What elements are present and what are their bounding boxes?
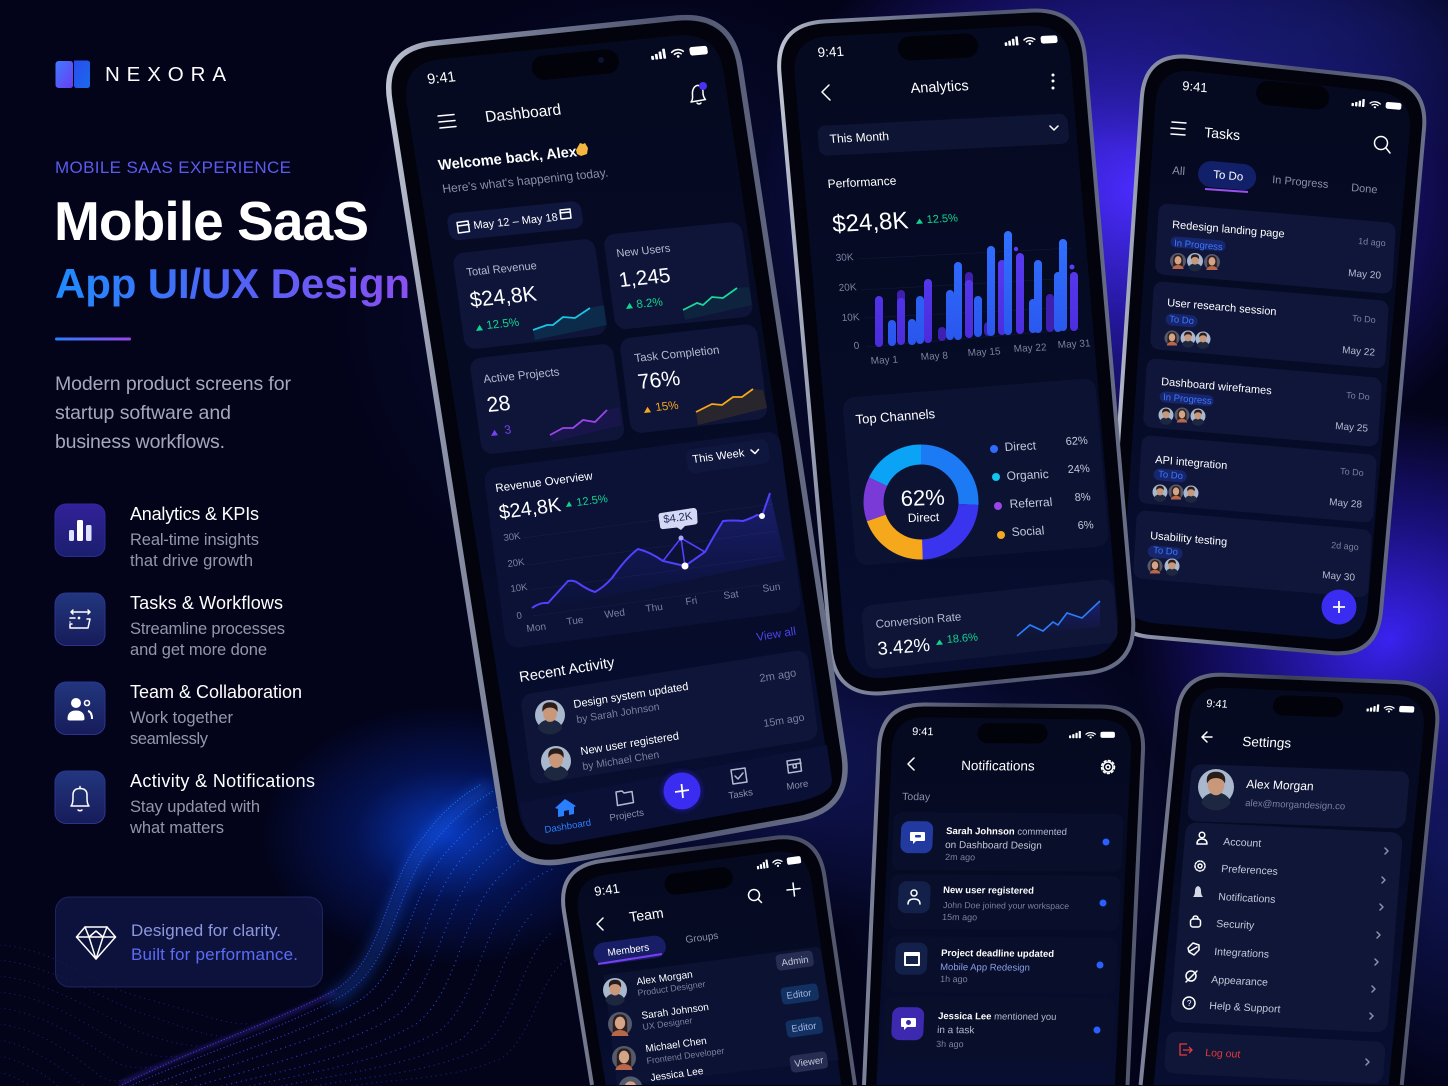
top channels card: Top Channels [855, 406, 936, 427]
header [822, 74, 1054, 100]
phone: notifications [864, 704, 1143, 1085]
card: wireframes: In Progress [1163, 392, 1212, 407]
phone: settings [1141, 675, 1437, 1085]
dotted particle wave [0, 785, 566, 1086]
recent activity: View all [756, 625, 797, 644]
member: michael: Editor [791, 1021, 818, 1035]
status bar: 9:41 [1182, 78, 1208, 95]
header: Settings [1242, 734, 1292, 751]
status bar: 9:41 [593, 881, 621, 899]
icon: workflow [55, 593, 105, 646]
tabs: Done [1351, 182, 1378, 196]
device frame [1108, 57, 1424, 653]
kpi: revenue: 12.5% [486, 317, 520, 332]
screen [1122, 71, 1410, 639]
tab: more: More [786, 779, 809, 793]
donut chart [874, 454, 968, 550]
header [1202, 732, 1292, 751]
feature: team [55, 682, 302, 748]
section label: Today [902, 791, 931, 803]
item: mention: Jessica Lee mentioned you [938, 1011, 1057, 1023]
feature: activity [55, 771, 315, 837]
member: sarah: UX Designer [642, 1015, 693, 1032]
item: mention: in a task [937, 1025, 976, 1036]
sparkline [550, 407, 622, 442]
main title: Mobile SaaS [54, 190, 369, 252]
row: security [1190, 916, 1380, 938]
member: alex: Product Designer [637, 979, 706, 998]
revenue overview: This Week [692, 447, 746, 466]
intro paragraph: Modern product screens for [55, 373, 292, 395]
line chart: Mon [526, 622, 547, 635]
header [1171, 122, 1390, 153]
row: design system: Design system updated [573, 681, 689, 711]
card: usability [1133, 510, 1372, 598]
conversion card: 18.6% [946, 632, 979, 646]
feature text: Streamline processes [130, 620, 285, 638]
screen [578, 852, 841, 1085]
feature text: that drive growth [130, 552, 253, 570]
device frame [563, 837, 855, 1085]
top channels card: Direct [908, 510, 940, 525]
row: design system [535, 667, 797, 734]
feature text: Tasks & Workflows [130, 593, 283, 613]
header: Analytics [910, 78, 969, 97]
member: jessica: Viewer [794, 1055, 825, 1070]
row: help: ? [1187, 999, 1192, 1008]
row: new user: by Michael Chen [582, 750, 660, 773]
line chart: Wed [604, 607, 626, 621]
log out: Log out [1205, 1047, 1241, 1061]
card: redesign: 1d ago [1358, 236, 1386, 248]
bar chart: 20K [838, 282, 857, 294]
feature text: Real-time insights [130, 531, 259, 549]
line chart: 30K [503, 531, 522, 544]
feature text: what matters [129, 819, 224, 837]
legend: Direct [1004, 438, 1037, 454]
line chart: Tue [566, 615, 585, 628]
item: comment: 2m ago [945, 852, 975, 862]
top channels card [842, 378, 1109, 566]
kpi: projects [469, 343, 625, 455]
kpi: completion: 76% [636, 367, 682, 394]
phone: tasks [1108, 57, 1424, 653]
header [438, 82, 707, 128]
conversion card: 3.42% [877, 634, 931, 659]
top channels card: 62% [900, 485, 945, 511]
row: account [1197, 832, 1388, 854]
revenue overview [483, 431, 802, 649]
item: user: New user registered [943, 885, 1034, 897]
member: michael: Michael Chen [645, 1036, 708, 1055]
tagline text: Built for performance. [131, 945, 298, 964]
bar chart: 10K [841, 312, 860, 324]
performance [827, 174, 959, 238]
feature text: Activity & Notifications [130, 771, 315, 791]
card: research: May 22 [1342, 345, 1376, 359]
card: research: User research session [1167, 297, 1277, 318]
item: comment: Sarah Johnson commented [946, 826, 1067, 838]
row: new user [541, 712, 805, 780]
card: redesign: Redesign landing page [1172, 219, 1285, 241]
card: wireframes: Dashboard wireframes [1161, 376, 1273, 397]
phone: team [563, 837, 855, 1086]
row: account: Account [1223, 836, 1262, 850]
brand logo [56, 60, 226, 88]
tagline text: Designed for clarity. [131, 921, 281, 940]
feature text [130, 504, 259, 570]
recent activity: Recent Activity [518, 655, 616, 686]
row: security: Security [1216, 918, 1255, 932]
member: michael: Frontend Developer [646, 1046, 725, 1066]
intro paragraph: business workflows. [55, 431, 225, 453]
top channels card: 6% [1077, 519, 1094, 532]
legend: Organic [1006, 467, 1049, 483]
member: alex: Admin [781, 954, 809, 969]
bar chart [835, 235, 1091, 367]
period selector [817, 114, 1070, 156]
logo mark [56, 60, 90, 88]
sparkline [533, 305, 607, 340]
revenue overview: Revenue Overview [494, 469, 594, 495]
status bar: 9:41 [912, 726, 934, 738]
bar chart: May 8 [920, 351, 949, 363]
card: api: To Do [1340, 466, 1364, 478]
row: appearance: Appearance [1211, 974, 1269, 989]
member list [603, 947, 839, 1086]
legend: Referral [1009, 495, 1053, 511]
kpi: revenue [452, 238, 607, 350]
legend [990, 438, 1053, 539]
kpi: revenue: $24,8K [468, 283, 538, 312]
line chart: 20K [507, 557, 526, 570]
line chart [503, 493, 785, 635]
tabs [1172, 160, 1378, 196]
sub title: App UI/UX Design [55, 260, 410, 307]
performance: Performance [827, 174, 897, 191]
status bar [426, 45, 708, 88]
intro paragraph [55, 373, 292, 453]
feature text: Team & Collaboration [130, 682, 302, 702]
icon: diamond [76, 927, 116, 959]
feature text: Stay updated with [130, 798, 260, 816]
icon: people [55, 682, 105, 734]
card: usability: Usability testing [1150, 530, 1227, 549]
header [597, 883, 800, 930]
conversion card [861, 578, 1118, 670]
item: mention [891, 1007, 1100, 1049]
period selector: This Month [829, 129, 890, 146]
member: sarah [608, 983, 820, 1036]
card: research: To Do [1352, 313, 1376, 325]
line chart: Fri [685, 596, 698, 608]
top channels card: 24% [1067, 463, 1090, 476]
kpi: completion [619, 323, 768, 434]
member: alex [603, 950, 814, 1006]
kpi: completion: 15% [655, 400, 679, 414]
card: usability: To Do [1153, 545, 1178, 558]
notification list [882, 812, 1124, 1060]
tabs: Groups [685, 931, 719, 946]
device frame [779, 10, 1133, 693]
add button [661, 770, 703, 812]
item: user [898, 881, 1106, 922]
icon: bell [55, 771, 105, 824]
conversion card: Conversion Rate [875, 611, 962, 631]
member: sarah: Sarah Johnson [641, 1002, 710, 1022]
profile card [1187, 764, 1410, 829]
sparkline [1017, 601, 1100, 636]
header: Tasks [1204, 124, 1241, 143]
card: wireframes [1143, 358, 1382, 447]
tagline text [131, 921, 298, 964]
line chart: Thu [645, 602, 664, 615]
card: research: To Do [1169, 314, 1194, 327]
status bar [593, 855, 802, 899]
status bar [912, 723, 1115, 744]
card: usability: 2d ago [1331, 540, 1359, 552]
kpi: projects: 3 [503, 422, 512, 437]
profile card: alex@morgandesign.co [1245, 798, 1346, 812]
performance: 12.5% [926, 212, 959, 226]
tabs: In Progress [1272, 174, 1329, 191]
sparkline [696, 389, 767, 425]
intro paragraph: startup software and [55, 402, 231, 424]
card: api [1138, 435, 1377, 523]
item: deadline: 1h ago [940, 974, 968, 984]
line chart: Sat [723, 589, 740, 602]
kpi: projects: 28 [485, 392, 512, 417]
sparkline [683, 287, 752, 320]
row: new user: 15m ago [763, 712, 805, 730]
row: preferences: Preferences [1221, 863, 1278, 878]
feature text [129, 771, 315, 837]
header: Notifications [961, 758, 1035, 774]
row: notifications: Notifications [1218, 891, 1276, 906]
header: Team [628, 905, 665, 925]
tab: projects: Projects [609, 807, 645, 824]
tab: tasks [728, 768, 754, 802]
item: mention: 3h ago [936, 1039, 964, 1049]
member: alex: Alex Morgan [636, 970, 694, 988]
item: deadline [895, 942, 1104, 984]
tabs [592, 931, 719, 966]
accent divider [55, 338, 131, 340]
status bar [817, 33, 1058, 61]
card: redesign: In Progress [1174, 238, 1223, 253]
greeting: Welcome back, Alex [437, 144, 579, 174]
kpi: users: 1,245 [617, 264, 672, 292]
tab bar [519, 745, 832, 844]
card: usability: May 30 [1322, 570, 1356, 584]
screen [1154, 688, 1424, 1085]
status bar: 9:41 [817, 44, 845, 60]
row: notifications [1193, 886, 1383, 910]
row: integrations: Integrations [1214, 946, 1270, 961]
member: jessica: Jessica Lee [650, 1066, 705, 1084]
greeting: Here's what's happening today. [441, 166, 609, 196]
feature: tasks [55, 593, 285, 659]
status bar: 9:41 [1206, 698, 1228, 711]
card: api: May 28 [1329, 497, 1363, 511]
tabs: To Do [1213, 169, 1244, 184]
tabs: All [1172, 165, 1185, 178]
bar chart: 0 [853, 341, 860, 352]
task cards [1133, 203, 1396, 598]
tabs: Members [607, 942, 650, 959]
screen [876, 717, 1131, 1085]
phone: analytics [779, 10, 1133, 693]
header: Dashboard [484, 102, 562, 126]
kpi: completion: Task Completion [634, 345, 720, 365]
kpi: projects: Active Projects [483, 366, 561, 386]
phone: dashboard [389, 18, 845, 863]
date filter: May 12 – May 18 [473, 212, 559, 232]
bar chart: 30K [835, 252, 854, 264]
item: deadline: Project deadline updated [941, 948, 1054, 960]
profile card: Alex Morgan [1246, 777, 1314, 793]
tab: projects [609, 791, 645, 824]
device frame [389, 18, 845, 863]
brand name: NEXORA [105, 63, 226, 86]
tab: more [786, 759, 809, 793]
recent activity [518, 625, 819, 785]
row: new user: New user registered [580, 730, 680, 758]
eyebrow: MOBILE SAAS EXPERIENCE [55, 158, 291, 177]
status bar [1182, 78, 1402, 111]
tooltip [658, 508, 698, 530]
revenue overview: $24,8K [497, 494, 563, 524]
top channels card: 8% [1074, 491, 1091, 504]
log out [1164, 1031, 1386, 1084]
item: comment [900, 821, 1110, 862]
device frame [1141, 675, 1437, 1085]
line chart: 0 [516, 610, 523, 622]
feature text: seamlessly [130, 730, 209, 748]
card: wireframes: May 25 [1335, 421, 1369, 435]
feature text: and get more done [130, 641, 267, 659]
bar chart: May 22 [1013, 342, 1047, 355]
device frame [864, 704, 1143, 1085]
row: integrations [1188, 943, 1378, 965]
bar chart: May 1 [870, 355, 899, 367]
revenue overview: 12.5% [576, 493, 609, 509]
card: api: To Do [1158, 469, 1183, 482]
item: deadline: Mobile App Redesign [940, 962, 1030, 974]
row: help: Help & Support [1209, 1000, 1281, 1016]
kpi: revenue: Total Revenue [466, 260, 538, 279]
greeting [437, 143, 609, 196]
settings list [1170, 822, 1403, 1033]
kpi: users: New Users [616, 243, 672, 260]
legend: Social [1011, 523, 1045, 539]
top channels card: 62% [1065, 435, 1088, 448]
feature: analytics [55, 504, 259, 570]
member: jessica [619, 1051, 829, 1085]
bar chart: May 15 [967, 346, 1001, 359]
bar chart: May 31 [1057, 338, 1091, 351]
card: redesign [1155, 203, 1396, 294]
screen [795, 26, 1118, 678]
member: sarah: Editor [786, 988, 813, 1002]
row: preferences [1195, 861, 1385, 883]
add button [1322, 590, 1356, 624]
row: appearance [1186, 971, 1375, 992]
screen [406, 35, 827, 845]
tab: dashboard: Dashboard [544, 817, 592, 836]
tooltip: $4.2K [663, 510, 694, 526]
feature text [130, 593, 285, 659]
kpi: users [603, 221, 754, 330]
card: redesign: May 20 [1348, 268, 1382, 282]
feature text: Work together [130, 709, 234, 727]
icon: bars [55, 504, 105, 556]
performance: $24,8K [831, 207, 910, 238]
card: api: API integration [1155, 454, 1228, 472]
date filter [446, 201, 584, 241]
card: research [1150, 281, 1389, 369]
feature text: Analytics & KPIs [130, 504, 259, 524]
feature text [130, 682, 302, 748]
kpi: users: 8.2% [636, 296, 664, 311]
line chart: 10K [510, 582, 529, 595]
header [908, 758, 1114, 774]
row: design system: by Sarah Johnson [576, 702, 661, 726]
tab: tasks: Tasks [728, 787, 754, 802]
line chart: Sun [762, 582, 781, 595]
row: design system: 2m ago [759, 667, 797, 685]
item: user: John Doe joined your workspace [943, 900, 1070, 911]
tab: dashboard [544, 799, 592, 836]
item: user: 15m ago [942, 912, 977, 922]
member: michael [612, 1016, 824, 1070]
card: wireframes: To Do [1346, 390, 1370, 402]
status bar: 9:41 [426, 69, 457, 88]
item: comment: on Dashboard Design [945, 840, 1042, 852]
row: help [1183, 997, 1373, 1019]
status bar [1206, 695, 1415, 717]
callout: tagline [56, 897, 322, 987]
